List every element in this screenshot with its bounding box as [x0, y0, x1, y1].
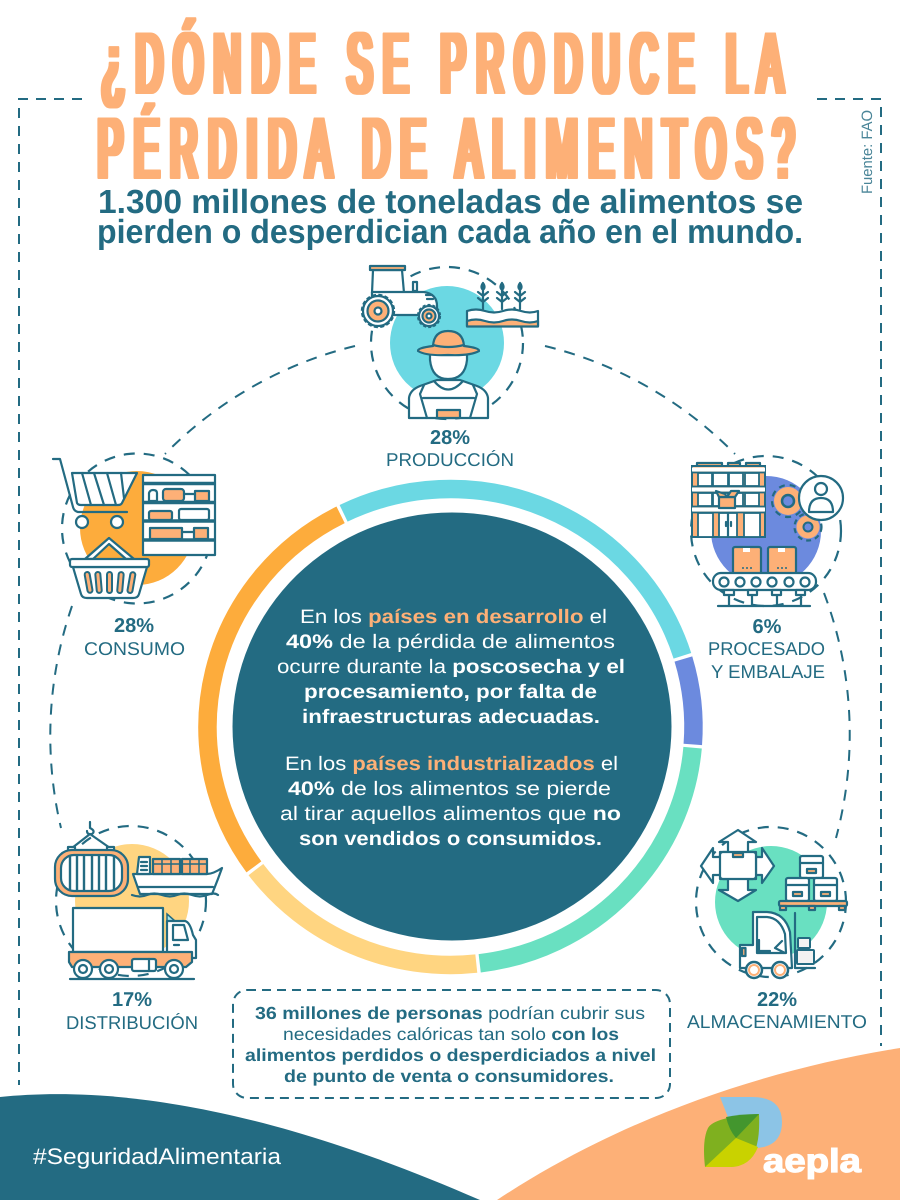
label: consumo — [84, 615, 185, 659]
icon: distribución (container, ship, truck) — [55, 822, 222, 979]
central text block: En los países en desarrollo el — [300, 606, 607, 628]
label: consumo: 28% — [114, 615, 154, 637]
cargo ship — [132, 857, 222, 896]
central text block: 40% de los alimentos se pierde — [288, 778, 611, 800]
logo: aepla — [704, 1097, 862, 1179]
segment: distribución 17% — [256, 870, 476, 965]
central text block: 40% de la pérdida de alimentos — [286, 631, 615, 653]
label: consumo: CONSUMO — [84, 638, 185, 659]
central circle — [232, 512, 672, 940]
logo: aepla: aepla — [763, 1142, 862, 1179]
central text block: ocurre durante la poscosecha y el — [277, 656, 625, 678]
icon: procesado y embalaje (factory, gears, conveyor) — [691, 456, 843, 606]
store shelf — [143, 475, 215, 555]
central text block: procesamiento, por falta de — [304, 681, 597, 703]
central text block — [277, 606, 625, 850]
dashed connector circle — [50, 346, 850, 838]
label: distribución: DISTRIBUCIÓN — [66, 1012, 198, 1033]
bottom wave: teal — [0, 1094, 480, 1200]
label: producción: 28% — [430, 427, 470, 449]
segment: consumo 28% — [208, 515, 341, 867]
central text block: al tirar aquellos alimentos que no — [280, 803, 621, 825]
label: procesado y embalaje — [708, 616, 825, 682]
icon: consumo (cart, shelf, basket) — [53, 454, 215, 604]
callout: 36 millones: 36 millones de personas podrían cubrir sus — [255, 1003, 645, 1023]
callout: 36 millones — [233, 990, 670, 1098]
forklift — [740, 912, 815, 978]
callout: 36 millones: necesidades calóricas tan solo con los — [283, 1024, 619, 1044]
stacked crates on pallet — [779, 856, 847, 910]
segment: producción 28% — [344, 489, 682, 656]
label: procesado y embalaje: 6% — [753, 616, 782, 638]
label: almacenamiento: ALMACENAMIENTO — [687, 1011, 867, 1032]
directional arrows around box — [701, 830, 774, 901]
subtitle — [97, 184, 803, 251]
hanging container — [55, 822, 128, 896]
shopping cart — [53, 459, 137, 528]
hashtag: #SeguridadAlimentaria — [33, 1144, 282, 1169]
boxes on conveyor — [713, 547, 816, 606]
field with crops — [467, 283, 538, 326]
callout: 36 millones: de punto de venta o consumidores. — [284, 1066, 614, 1086]
subtitle: pierden o desperdician cada año en el mundo. — [97, 214, 803, 251]
title — [98, 16, 805, 196]
segment: procesado 6% — [683, 659, 693, 744]
farmer — [409, 331, 488, 418]
bottom wave: orange — [497, 1048, 900, 1200]
gears — [772, 485, 822, 540]
label: procesado y embalaje: PROCESADO — [708, 638, 825, 659]
worker badge — [799, 476, 843, 520]
truck — [69, 908, 196, 979]
tractor — [362, 266, 440, 327]
page frame: dashed border — [19, 99, 881, 1085]
label: distribución — [66, 989, 198, 1033]
central text block: son vendidos o consumidos. — [299, 828, 602, 850]
label: almacenamiento: 22% — [757, 989, 797, 1011]
source note: Fuente: FAO — [859, 110, 876, 194]
subtitle: 1.300 millones de toneladas de alimentos se — [98, 184, 803, 221]
icon: producción (farmer, tractor, field) — [362, 266, 538, 419]
donut chart: share of food loss by stage — [208, 489, 693, 965]
label: procesado y embalaje: Y EMBALAJE — [711, 661, 825, 682]
label: almacenamiento — [687, 989, 867, 1032]
icon: almacenamiento (arrows, boxes, forklift) — [696, 827, 847, 978]
label: producción: PRODUCCIÓN — [386, 449, 514, 470]
label: producción — [386, 427, 514, 470]
callout: 36 millones: alimentos perdidos o desperdiciados a nivel — [245, 1045, 656, 1065]
label: distribución: 17% — [112, 989, 152, 1011]
segment: almacenamiento 22% — [480, 748, 693, 963]
factory building — [692, 463, 765, 537]
shopping basket — [70, 538, 149, 598]
central text block: infraestructuras adecuadas. — [302, 706, 600, 728]
central text block: En los países industrializados el — [285, 753, 618, 775]
